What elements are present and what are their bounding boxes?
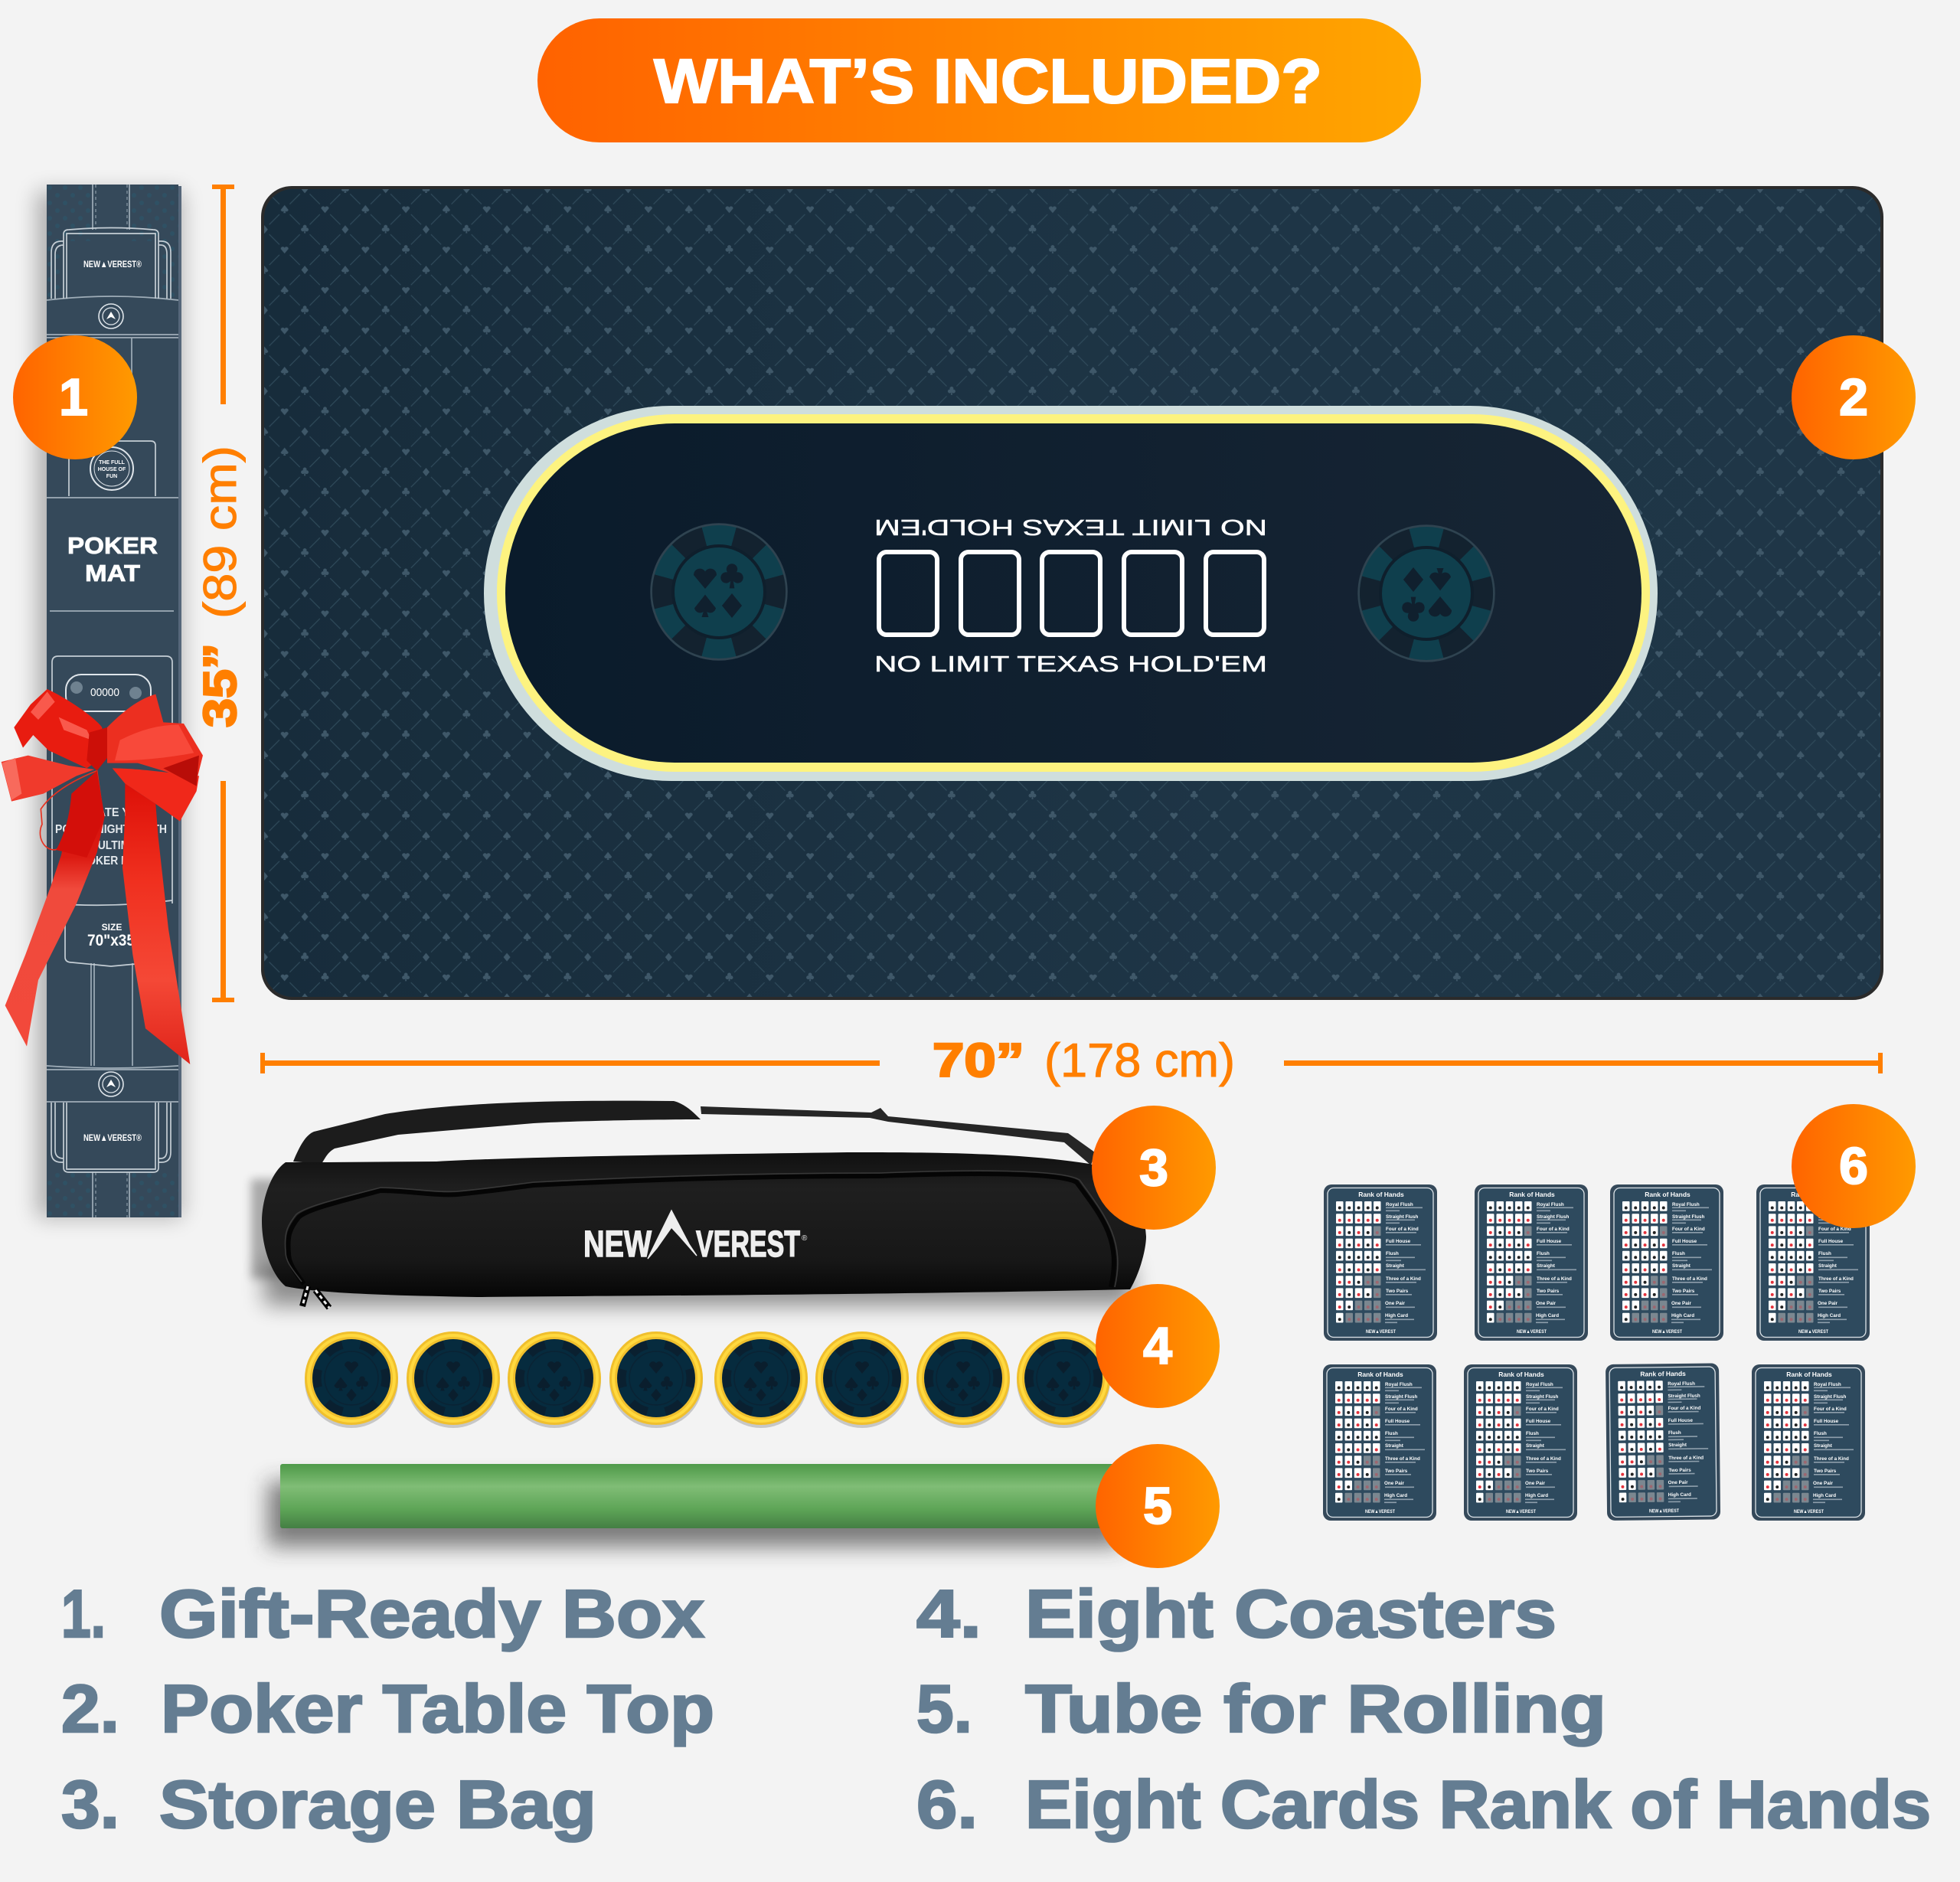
panel: gift-ready box: THE ULTIMATE <box>74 839 150 852</box>
panel: poker table top mat <box>261 186 1883 1000</box>
card 1: Full House <box>1386 1239 1411 1244</box>
card 4: Four of a Kind <box>1818 1227 1851 1232</box>
card 6: Straight Flush <box>1526 1394 1558 1400</box>
card 5: Straight Flush <box>1385 1394 1417 1400</box>
card 5: Rank of Hands <box>1357 1371 1403 1378</box>
card 8: Three of a Kind <box>1814 1456 1849 1462</box>
card 5 <box>1323 1364 1436 1521</box>
eight rank of hands cards <box>1323 1184 1870 1521</box>
panel: gift-ready box: 00000 <box>90 686 119 699</box>
card 8: Straight <box>1814 1443 1833 1449</box>
card 8: NEW▲VEREST <box>1794 1509 1824 1514</box>
card 5: Royal Flush <box>1385 1382 1413 1387</box>
list: right column: Eight Cards Rank of Hands <box>1025 1766 1931 1842</box>
dimension: 35 inch height: (89 cm) <box>194 446 246 619</box>
card 3: High Card <box>1671 1313 1694 1318</box>
card 6: Rank of Hands <box>1498 1371 1544 1378</box>
card 7: Straight <box>1668 1443 1687 1448</box>
list: left column: Storage Bag <box>159 1766 596 1842</box>
card 6: Straight <box>1526 1443 1545 1449</box>
card 3: Three of a Kind <box>1672 1276 1707 1282</box>
card 4: NEW▲VEREST <box>1798 1329 1828 1335</box>
dimension: 70 inch width: 70” <box>933 1034 1024 1087</box>
list: left column <box>61 1576 714 1842</box>
card 3: Straight <box>1672 1263 1691 1269</box>
badge 1 <box>13 335 137 459</box>
card 2: One Pair <box>1536 1301 1556 1306</box>
racetrack betting line <box>484 406 1658 781</box>
card 1 <box>1324 1184 1437 1341</box>
card 1: Two Pairs <box>1386 1289 1409 1294</box>
right poker chip <box>1357 524 1496 663</box>
card 7: Four of a Kind <box>1668 1406 1700 1411</box>
card 3: Royal Flush <box>1672 1202 1700 1207</box>
card 5: Four of a Kind <box>1385 1407 1418 1412</box>
panel: gift-ready box: HOUSE OF <box>98 467 126 472</box>
card 1: NEW▲VEREST <box>1366 1329 1396 1335</box>
card 7: Two Pairs <box>1668 1468 1691 1473</box>
list: right column <box>916 1576 1931 1842</box>
list: right column: Tube for Rolling <box>1025 1671 1606 1746</box>
badge 5: 5 <box>1143 1477 1172 1535</box>
card 5: Straight <box>1385 1443 1404 1449</box>
card 1: Rank of Hands <box>1358 1191 1404 1198</box>
card 7: NEW▲VEREST <box>1649 1508 1679 1514</box>
card 3: Flush <box>1672 1251 1685 1256</box>
card 1: Straight <box>1386 1263 1405 1269</box>
card 5: Full House <box>1385 1419 1410 1424</box>
card 8: Straight Flush <box>1814 1394 1846 1400</box>
bag logo <box>583 1211 808 1265</box>
panel: gift-ready box: THE FULL <box>99 460 126 466</box>
card 2: Full House <box>1537 1239 1562 1244</box>
list: right column: 4. <box>916 1576 982 1652</box>
card 6: High Card <box>1525 1493 1548 1498</box>
card 6: Three of a Kind <box>1526 1456 1561 1462</box>
list: left column: 3. <box>61 1766 119 1842</box>
panel: gift-ready box: SIZE <box>102 922 122 933</box>
list: left column: Gift-Ready Box <box>159 1576 704 1652</box>
card 4: Three of a Kind <box>1818 1276 1854 1282</box>
table text: NO LIMIT TEXAS HOLD'EM <box>874 652 1267 677</box>
card 6: Flush <box>1526 1431 1539 1436</box>
card 6: One Pair <box>1525 1481 1545 1486</box>
card 7: Rank of Hands <box>1640 1370 1686 1378</box>
badge 1: 1 <box>59 368 88 426</box>
badge 5 <box>1096 1444 1220 1568</box>
card 5: Two Pairs <box>1385 1469 1408 1474</box>
dimension: 70 inch width: (178 cm) <box>1044 1034 1235 1087</box>
card 6 <box>1464 1364 1577 1521</box>
card 2: High Card <box>1536 1313 1559 1318</box>
card 6: NEW▲VEREST <box>1506 1509 1536 1514</box>
panel: gift-ready box: 70"x35" <box>87 932 142 949</box>
list: left column: 2. <box>61 1671 119 1746</box>
icon: red gift ribbon <box>2 689 203 1064</box>
card 4: Royal Flush <box>1818 1202 1846 1207</box>
panel: gift-ready box: POKER NIGHTS WITH <box>55 823 167 836</box>
card 2: Two Pairs <box>1537 1289 1560 1294</box>
badge 2: 2 <box>1839 368 1868 426</box>
dimension: 35 inch height <box>194 185 246 1002</box>
bag logo: VEREST <box>696 1224 800 1265</box>
card 4: One Pair <box>1818 1301 1838 1306</box>
card 2: NEW▲VEREST <box>1517 1329 1547 1335</box>
panel: gift-ready box: NEW▲VEREST® <box>83 259 142 270</box>
card 3 <box>1610 1184 1723 1341</box>
card 4: High Card <box>1818 1313 1841 1318</box>
card 1: Three of a Kind <box>1386 1276 1421 1282</box>
card 8: One Pair <box>1813 1481 1833 1486</box>
card 3: NEW▲VEREST <box>1652 1329 1682 1335</box>
list: right column: Eight Coasters <box>1025 1576 1557 1652</box>
card 1: Royal Flush <box>1386 1202 1413 1207</box>
card 3: Two Pairs <box>1672 1289 1695 1294</box>
eight coasters <box>305 1331 1110 1428</box>
tube for rolling <box>268 1464 1122 1547</box>
card 2: Royal Flush <box>1537 1202 1564 1207</box>
card 8: High Card <box>1813 1493 1836 1498</box>
card 1: Straight Flush <box>1386 1214 1418 1220</box>
number badges <box>13 335 1916 1568</box>
badge 3 <box>1092 1106 1216 1230</box>
card 7: High Card <box>1668 1492 1691 1498</box>
panel: gift-ready box: MAT <box>85 560 140 586</box>
card 4: Straight <box>1818 1263 1838 1269</box>
card 8: Rank of Hands <box>1786 1371 1832 1378</box>
card 6: Royal Flush <box>1526 1382 1553 1387</box>
card 1: Flush <box>1386 1251 1399 1256</box>
card 7: Royal Flush <box>1668 1381 1695 1387</box>
card 5: Flush <box>1385 1431 1398 1436</box>
card 2 <box>1475 1184 1588 1341</box>
badge 6: 6 <box>1839 1137 1868 1195</box>
card 5: Three of a Kind <box>1385 1456 1420 1462</box>
card 2: Rank of Hands <box>1509 1191 1555 1198</box>
dimension: 35 inch height: 35” <box>194 643 246 727</box>
card 8: Flush <box>1814 1431 1827 1436</box>
panel: gift-ready box <box>37 185 182 1217</box>
card 1: Four of a Kind <box>1386 1227 1419 1232</box>
card 1: One Pair <box>1385 1301 1405 1306</box>
panel: gift-ready box: NEW▲VEREST® <box>83 1132 142 1143</box>
card 1: High Card <box>1385 1313 1408 1318</box>
bag logo: ® <box>802 1234 808 1243</box>
card 3: Full House <box>1672 1239 1697 1244</box>
title pill <box>537 18 1421 142</box>
panel: gift-ready box: ELEVATE YOUR <box>70 806 154 819</box>
card 4 <box>1756 1184 1870 1341</box>
card 2: Straight Flush <box>1537 1214 1569 1220</box>
panel: gift-ready box: POKER MAT <box>80 854 143 867</box>
list: right column: 5. <box>916 1671 972 1746</box>
card 7: Flush <box>1668 1430 1681 1436</box>
card 4: Rank of Hands <box>1791 1191 1837 1198</box>
card 8 <box>1752 1364 1865 1521</box>
list: right column: 6. <box>916 1766 978 1842</box>
card 3: Straight Flush <box>1672 1214 1704 1220</box>
card 7: Three of a Kind <box>1668 1456 1704 1461</box>
panel: gift-ready box: POKER <box>67 532 158 559</box>
card 5: One Pair <box>1384 1481 1404 1486</box>
card 7 <box>1606 1363 1720 1521</box>
storage bag <box>251 1101 1146 1308</box>
panel: gift-ready box: FUN <box>106 474 117 479</box>
card 4: Two Pairs <box>1818 1289 1841 1294</box>
card 3: Four of a Kind <box>1672 1227 1705 1232</box>
card 7: Straight Flush <box>1668 1394 1700 1399</box>
title pill: WHAT’S INCLUDED? <box>654 47 1322 116</box>
card 5: NEW▲VEREST <box>1365 1509 1395 1514</box>
card 4: Straight Flush <box>1818 1214 1851 1220</box>
card 3: One Pair <box>1671 1301 1691 1306</box>
badge 2 <box>1792 335 1916 459</box>
card 6: Four of a Kind <box>1526 1407 1559 1412</box>
bag logo: NEW <box>583 1224 652 1265</box>
card 7: One Pair <box>1668 1480 1688 1485</box>
card 8: Royal Flush <box>1814 1382 1841 1387</box>
upside-down table text: NO LIMIT TEXAS HOLD'EM <box>874 515 1267 539</box>
dimension: 70 inch width <box>260 1034 1883 1087</box>
card 5: High Card <box>1384 1493 1407 1498</box>
card 8: Four of a Kind <box>1814 1407 1847 1412</box>
card 6: Full House <box>1526 1419 1551 1424</box>
card 2: Four of a Kind <box>1537 1227 1570 1232</box>
card 2: Straight <box>1537 1263 1556 1269</box>
card 2: Three of a Kind <box>1537 1276 1572 1282</box>
card 3: Rank of Hands <box>1645 1191 1690 1198</box>
badge 4 <box>1096 1284 1220 1408</box>
card 4: Flush <box>1818 1251 1831 1256</box>
badge 4: 4 <box>1143 1317 1172 1375</box>
badge 3: 3 <box>1139 1139 1168 1197</box>
badge 6 <box>1792 1104 1916 1228</box>
card 6: Two Pairs <box>1526 1469 1549 1474</box>
list: left column: 1. <box>61 1576 106 1652</box>
left poker chip <box>649 522 789 662</box>
list: left column: Poker Table Top <box>161 1671 714 1746</box>
card 8: Two Pairs <box>1814 1469 1837 1474</box>
card 4: Full House <box>1818 1239 1844 1244</box>
community card boxes <box>879 552 1264 635</box>
card 8: Full House <box>1814 1419 1839 1424</box>
card 2: Flush <box>1537 1251 1550 1256</box>
card 7: Full House <box>1668 1418 1693 1423</box>
